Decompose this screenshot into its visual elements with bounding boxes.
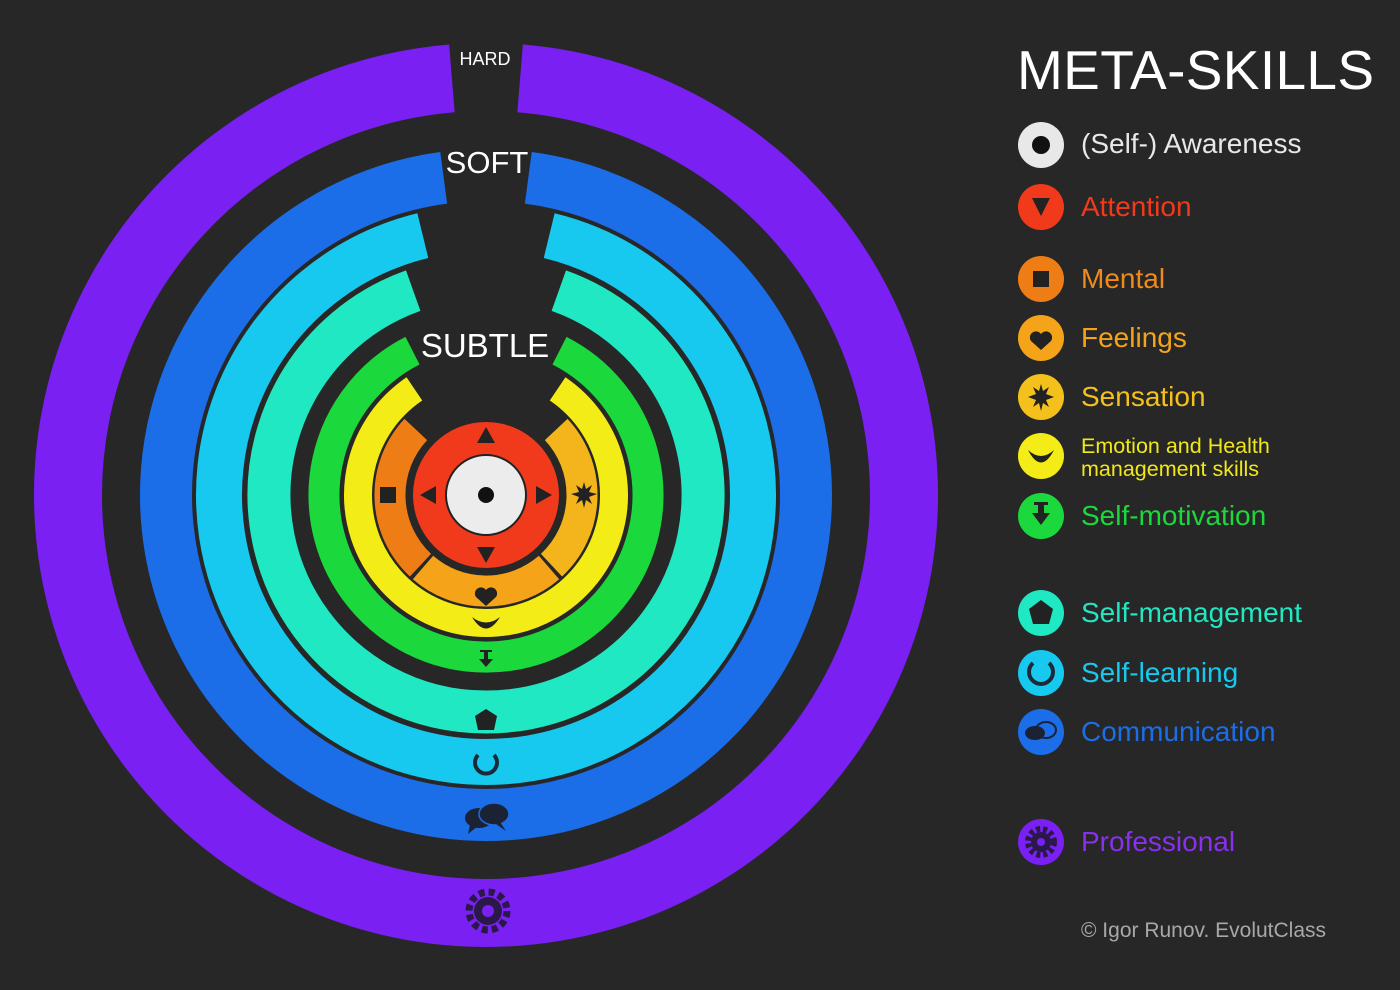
attention circle (red) [413, 422, 559, 568]
copyright: © Igor Runov. EvolutClass [1081, 919, 1326, 942]
ring: professional (purple) [68, 78, 904, 913]
ring: self-management (teal) [269, 291, 703, 712]
legend: sensation: Sensation [1081, 381, 1206, 412]
ring: emotion (yellow) [358, 389, 614, 623]
legend: self-management: Self-management [1081, 597, 1302, 628]
legend: emotion [1018, 433, 1270, 481]
legend: self-motivation [1018, 493, 1266, 539]
label: SUBTLE: SUBTLE [421, 327, 549, 364]
legend: awareness: (Self-) Awareness [1081, 128, 1301, 159]
legend [1018, 122, 1302, 865]
rings diagram [68, 78, 904, 913]
ring: self-motivation (green) [324, 351, 648, 657]
label: HARD: HARD [459, 49, 511, 69]
ring segment: sensation [552, 430, 582, 565]
legend: feelings: Feelings [1081, 322, 1187, 353]
legend: feelings [1018, 315, 1187, 361]
legend: sensation [1018, 374, 1206, 420]
legend: attention [1018, 184, 1192, 230]
icon: open circle (self-learning) [475, 755, 497, 774]
icon: down arrow (motivation) [479, 650, 493, 667]
label: SOFT: SOFT [446, 145, 528, 180]
legend: awareness [1018, 122, 1301, 168]
legend: professional: Professional [1081, 826, 1235, 857]
title: META-SKILLS [1017, 39, 1374, 101]
legend: attention: Attention [1081, 191, 1192, 222]
legend: emotion: management skills [1081, 457, 1259, 481]
icon: burst (sensation) [571, 482, 597, 508]
ring segment: mental [390, 430, 420, 565]
ring: communication (blue) [166, 178, 806, 815]
ring: self-learning (cyan) [219, 236, 753, 762]
legend: communication [1018, 709, 1276, 755]
awareness circle (white) [446, 455, 526, 535]
legend: emotion: Emotion and Health [1081, 434, 1270, 458]
legend: mental [1018, 256, 1165, 302]
legend: self-learning: Self-learning [1081, 657, 1238, 688]
icon: star (self-management) [475, 709, 497, 730]
ring segment: feelings [423, 568, 549, 591]
icon: gear (professional) [469, 892, 507, 930]
legend: professional [1018, 819, 1235, 865]
legend: self-learning [1018, 650, 1238, 696]
legend: mental: Mental [1081, 263, 1165, 294]
icon: crescent (emotion) [472, 617, 500, 628]
legend: communication: Communication [1081, 716, 1276, 747]
icon: speech bubbles (communication) [465, 803, 509, 834]
legend: self-motivation: Self-motivation [1081, 500, 1266, 531]
icon: heart (feelings) [475, 587, 497, 606]
icon: square (mental) [380, 487, 396, 503]
legend: self-management [1018, 590, 1302, 636]
